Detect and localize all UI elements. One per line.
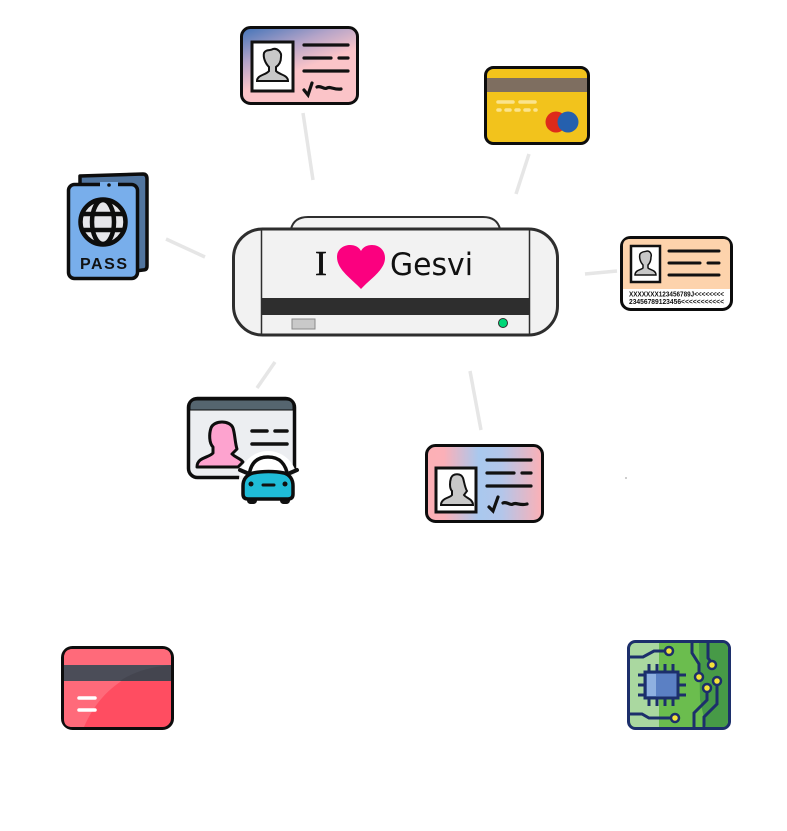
icon: driving licence with car — [188, 398, 297, 509]
passport label: PASS — [80, 256, 127, 273]
icon: yellow bank card — [486, 68, 588, 144]
small speck — [625, 477, 627, 479]
mrz text: XXXXXXX123456789J<<<<<<<< — [629, 292, 724, 298]
printer tray — [291, 217, 500, 229]
connector lines — [166, 113, 617, 430]
icon: id card bottom — [426, 446, 542, 522]
icon: passport — [68, 174, 147, 278]
printer led — [498, 318, 508, 328]
slogan I: I — [315, 244, 327, 283]
printer body — [234, 229, 558, 335]
mrz text: 23456789123456<<<<<<<<<<< — [629, 299, 724, 306]
printer slot — [261, 298, 530, 315]
heart — [337, 245, 385, 289]
icon: red card — [62, 648, 172, 728]
printer button — [292, 319, 315, 329]
car — [239, 451, 297, 509]
icon: id card top — [242, 28, 358, 104]
icon: circuit board chip — [628, 642, 730, 728]
slogan Gesvi: Gesvi — [390, 247, 473, 283]
icon: id card with machine-readable zone — [622, 238, 732, 310]
printer — [234, 217, 558, 335]
